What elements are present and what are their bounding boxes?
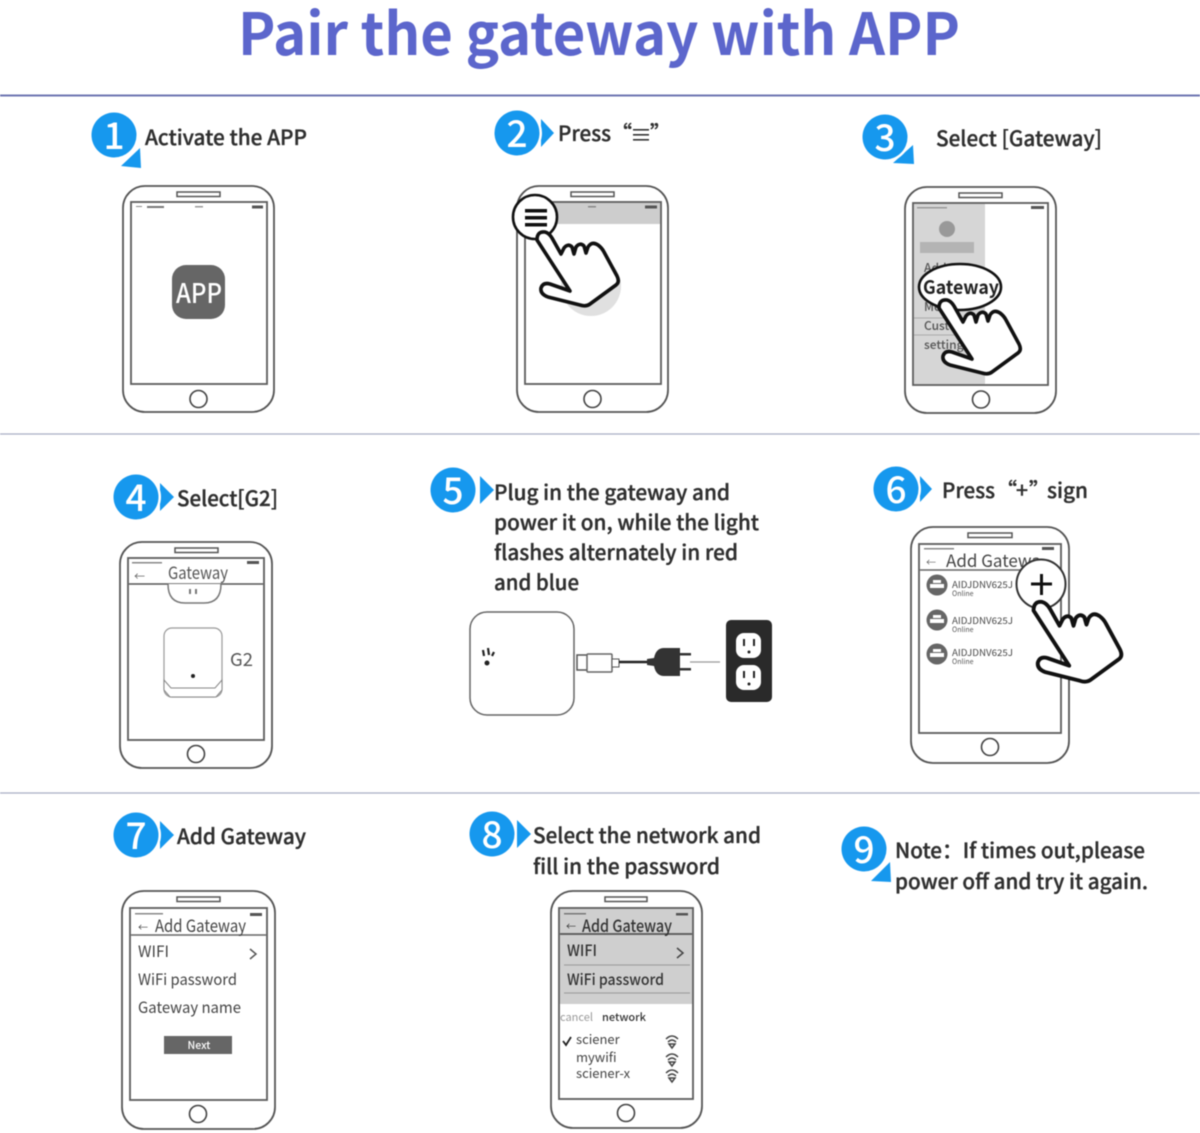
network list: sciener [576, 1029, 621, 1048]
badge 8: 8 [481, 805, 503, 859]
note [895, 835, 1148, 896]
label 8 [533, 820, 761, 881]
step 4 [111, 468, 278, 768]
callout: Gateway: Gateway [923, 273, 999, 300]
label 8: fill in the password [533, 851, 720, 881]
label 6: + [1016, 475, 1028, 505]
badge 2: 2 [506, 104, 528, 158]
device: gateway [164, 628, 222, 697]
label 6: sign [1047, 475, 1088, 505]
step 9 [839, 820, 1148, 896]
label 6 [942, 475, 1088, 505]
form: Add Gateway [155, 912, 246, 937]
header: Gateway: ← [134, 568, 145, 584]
gateway list [926, 574, 1013, 667]
menu items: Custom [924, 317, 968, 334]
menu items: Add [924, 259, 947, 276]
network list: cancel [560, 1009, 593, 1025]
badge 6 [871, 460, 932, 514]
header: Add Gateway: Add Gatewa [946, 547, 1041, 572]
phone 3 [905, 187, 1056, 413]
badge 7: 7 [125, 806, 147, 860]
form: ← [566, 918, 576, 933]
form: Add Gateway [582, 912, 673, 937]
badge 9 [839, 820, 891, 882]
phone 6 [911, 527, 1121, 763]
badge 3 [860, 108, 914, 164]
network list: sciener-x [576, 1063, 631, 1082]
label 5 [494, 477, 759, 597]
network list [560, 1009, 678, 1082]
form: Gateway name [138, 996, 241, 1018]
badge 1: 1 [103, 106, 125, 160]
badge 4 [111, 468, 174, 522]
step 2 [492, 104, 671, 412]
callout: Gateway [919, 264, 1001, 310]
step 8 [467, 805, 761, 1128]
callout: plus [1016, 560, 1066, 608]
step 5 [428, 461, 772, 715]
phone 8 [551, 891, 702, 1128]
form: WIFI [138, 940, 169, 962]
step 7 [111, 806, 307, 1129]
label 7: Add Gateway [177, 821, 307, 851]
badge 8 [467, 805, 531, 859]
network list: network [602, 1009, 647, 1025]
phone 4: G2 [230, 646, 253, 672]
gateway list: AIDJDNV625J [952, 578, 1013, 591]
icon: hand [939, 300, 1020, 374]
menu items: settings [924, 336, 970, 353]
label 6: “ [996, 475, 1017, 505]
badge 9: 9 [853, 820, 875, 874]
button: Next [164, 1036, 232, 1054]
badge 4: 4 [125, 468, 147, 522]
device: gateway [470, 612, 574, 715]
label 2: Press [558, 118, 611, 148]
icon: APP: APP [176, 272, 222, 311]
callout: menu [513, 195, 557, 239]
form: WiFi password [138, 968, 237, 990]
badge 5 [428, 461, 494, 515]
form: WiFi password [567, 968, 664, 990]
button: Next: Next [188, 1038, 210, 1053]
label 2: ” [650, 118, 671, 148]
badge 3: 3 [874, 108, 896, 162]
label 4: Select[G2] [177, 483, 278, 513]
gateway list: AIDJDNV625J [952, 646, 1013, 659]
badge 2 [492, 104, 554, 158]
badge 5: 5 [442, 461, 464, 515]
phone 2 [513, 186, 668, 412]
menu items: Me [924, 298, 941, 315]
cable and plug [577, 648, 720, 676]
gateway list: Online [952, 625, 974, 635]
note: Note：If times out,please [895, 835, 1145, 865]
badge 7 [111, 806, 174, 860]
label 5: power it on, while the light [494, 507, 759, 537]
step 1 [89, 106, 307, 412]
label 6: Press [942, 475, 995, 505]
network list: mywifi [576, 1047, 617, 1066]
icon: APP [172, 265, 225, 319]
step 3 [860, 108, 1102, 413]
form [566, 912, 683, 990]
icon: hand [1034, 602, 1121, 682]
label 3: Select [Gateway] [936, 123, 1102, 153]
gateway list: AIDJDNV625J [952, 614, 1013, 627]
phone 7 [122, 891, 275, 1129]
gateway list: Online [952, 589, 974, 599]
header: Gateway: Gateway [168, 559, 228, 584]
form [138, 912, 256, 1018]
menu items [924, 259, 970, 353]
form: ← [138, 919, 148, 934]
header: Gateway [134, 559, 228, 584]
note: power off and try it again. [895, 866, 1148, 896]
label 5: and blue [494, 567, 579, 597]
icon: hand [537, 232, 618, 306]
label 2 [558, 118, 671, 148]
badge 6: 6 [885, 460, 907, 514]
label 5: flashes alternately in red [494, 537, 738, 567]
label 6: ” [1029, 475, 1050, 505]
label 1: Activate the APP [145, 122, 307, 152]
label 5: Plug in the gateway and [494, 477, 730, 507]
badge 1 [89, 106, 141, 168]
gateway list: Online [952, 657, 974, 667]
form: WIFI [567, 939, 597, 961]
label 2: “ [611, 118, 632, 148]
phone 4 [120, 542, 272, 768]
step 6 [871, 460, 1121, 763]
label 8: Select the network and [533, 820, 761, 850]
phone 1 [123, 186, 274, 412]
outlet [726, 620, 772, 702]
header: Add Gateway: ← [926, 554, 936, 569]
